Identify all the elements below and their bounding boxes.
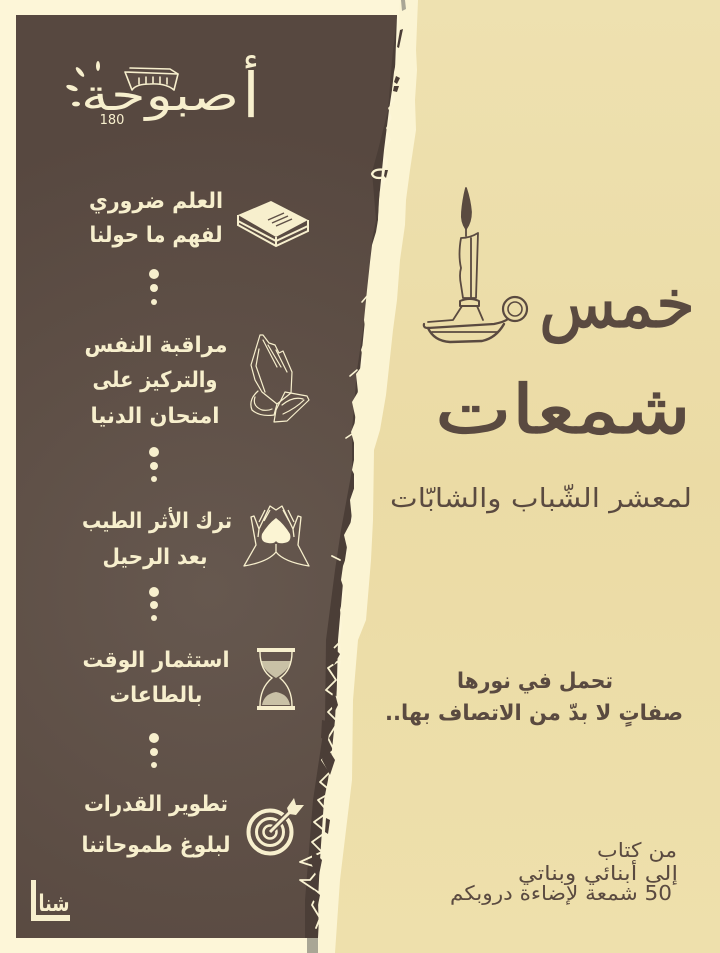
separator dots 1 bbox=[149, 269, 159, 305]
text: item 4: استثمار الوقت bbox=[82, 648, 230, 673]
item 2 bbox=[84, 333, 309, 429]
icon: book bbox=[238, 201, 308, 246]
text: item 4 bbox=[82, 648, 230, 708]
title: second line: شمعات bbox=[435, 371, 691, 450]
text: item 5: لبلوغ طموحاتنا bbox=[82, 833, 230, 858]
title: first line: خمس bbox=[539, 265, 695, 344]
text: item 3: ترك الأثر الطيب bbox=[82, 506, 232, 534]
item 4 bbox=[82, 648, 295, 710]
text: item 2: امتحان الدنيا bbox=[90, 404, 220, 429]
logo sun rays bbox=[66, 61, 100, 106]
torn edge: cream strip bbox=[318, 0, 720, 953]
logo arch bbox=[125, 68, 178, 90]
logo number: 180 bbox=[100, 113, 124, 128]
item 3 bbox=[82, 506, 309, 570]
corner grey marks bbox=[307, 0, 406, 953]
text: carried qualities bbox=[385, 669, 683, 728]
text: item 2 bbox=[84, 333, 228, 429]
logo wordmark: صبوحة bbox=[81, 70, 239, 121]
torn edge: white curl and zigzags bbox=[300, 170, 386, 928]
text: book source bbox=[450, 838, 678, 905]
text: item 1: لفهم ما حولنا bbox=[90, 223, 222, 248]
text: item 1: العلم ضروري bbox=[89, 189, 223, 214]
panel: dark torn paper bbox=[16, 15, 397, 938]
text: item 5 bbox=[82, 792, 230, 858]
separator dots 2 bbox=[149, 447, 159, 482]
text: book source: من كتاب bbox=[597, 838, 677, 862]
logo: Osbouha 180 bbox=[66, 55, 260, 132]
item 1 bbox=[89, 189, 308, 248]
icon: praying hands bbox=[251, 335, 309, 422]
logo alef: أ bbox=[242, 55, 260, 132]
subtitle: لمعشر الشّباب والشابّات bbox=[390, 483, 692, 514]
text: carried qualities: صفاتٍ لا بدّ من الاتصاف بها.. bbox=[385, 701, 683, 728]
icon: target bbox=[248, 798, 304, 854]
torn edge: dark flecks bbox=[312, 29, 403, 905]
text: item 3 bbox=[82, 506, 232, 570]
right tan paper bbox=[335, 0, 720, 953]
separator dots 3 bbox=[149, 587, 159, 621]
text: item 2: مراقبة النفس bbox=[84, 333, 228, 358]
text: book source: إلى أبنائي وبناتي bbox=[518, 860, 678, 886]
text: item 1 bbox=[89, 189, 223, 248]
text: carried qualities: تحمل في نورها bbox=[457, 669, 613, 694]
corner logo bbox=[31, 880, 70, 921]
item 5 bbox=[82, 792, 304, 858]
text: item 4: بالطاعات bbox=[110, 683, 202, 708]
text: item 5: تطوير القدرات bbox=[84, 792, 228, 817]
text: book source: 50 شمعة لإضاءة دروبكم bbox=[450, 881, 672, 905]
separator dots 4 bbox=[149, 733, 159, 768]
text: item 2: والتركيز على bbox=[92, 368, 218, 393]
text: item 3: بعد الرحيل bbox=[102, 545, 208, 570]
icon: hourglass bbox=[257, 648, 295, 710]
icon: hands with heart bbox=[244, 506, 309, 566]
corner logo: شنا bbox=[38, 891, 70, 917]
icon: candle bbox=[424, 188, 527, 342]
